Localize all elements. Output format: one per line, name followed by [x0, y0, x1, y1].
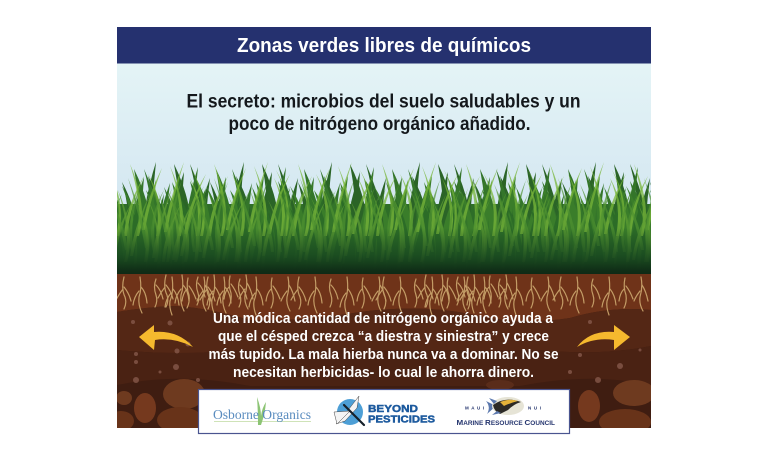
body text: más tupido. La mala hierba nunca va a dominar. No se [208, 347, 558, 363]
grass [117, 162, 651, 274]
logo: Maui Nui Marine Resource Council: MARINE RESOURCE COUNCIL [456, 418, 555, 427]
logo: Maui Nui Marine Resource Council: MAUI [465, 406, 484, 410]
body text: Una módica cantidad de nitrógeno orgánico ayuda a [213, 311, 554, 327]
soil layers [117, 274, 651, 428]
panel: sponsor logos [198, 390, 570, 434]
logo: Beyond Pesticides: PESTICIDES [368, 414, 435, 426]
logo: Beyond Pesticides: BEYOND [368, 403, 418, 415]
title: Zonas verdes libres de químicos [237, 34, 531, 57]
subheading: poco de nitrógeno orgánico añadido. [228, 114, 530, 135]
header bar [117, 27, 651, 64]
body text [208, 311, 558, 381]
arrow: left [139, 325, 193, 350]
plant roots [116, 275, 648, 315]
sky background [117, 63, 651, 213]
subheading: El secreto: microbios del suelo saludables y un [186, 92, 580, 112]
body text: que el césped crezca “a diestra y siniestra” y crece [218, 329, 549, 345]
stones [117, 379, 651, 428]
arrow: right [577, 325, 630, 350]
body text: necesitan herbicidas- lo cual le ahorra dinero. [233, 365, 534, 381]
logo: Osborne Organics [213, 397, 311, 425]
logo: Maui Nui Marine Resource Council: NUI [528, 406, 541, 410]
panel: illustrated lawn scene [117, 64, 651, 428]
logo: Osborne Organics: Osborne Organics [213, 408, 311, 423]
logo: Maui Nui Marine Resource Council [456, 397, 555, 427]
logo: Beyond Pesticides [334, 396, 435, 426]
subheading [186, 92, 580, 135]
soil specks [131, 320, 642, 383]
icon: reef triggerfish [486, 397, 524, 415]
